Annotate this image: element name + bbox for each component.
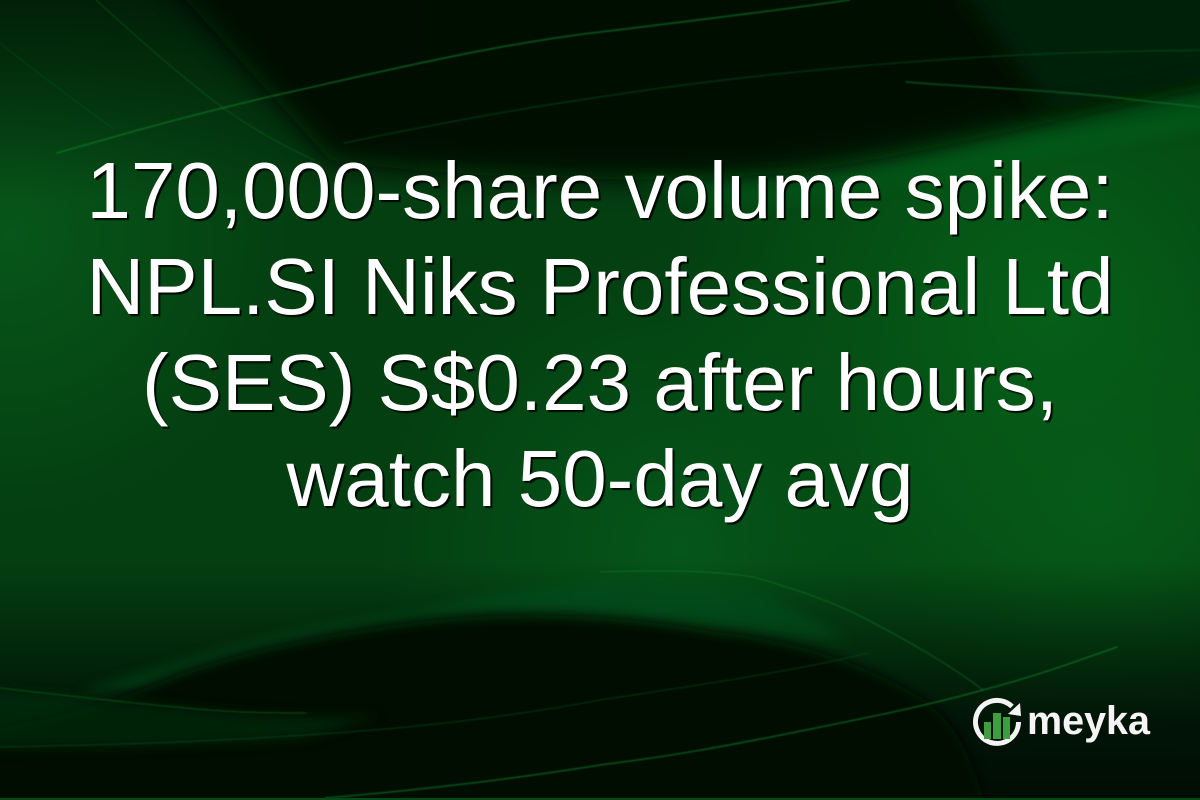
title: watch 50-day avg	[286, 434, 914, 523]
title	[86, 146, 1114, 525]
logo: meyka	[973, 698, 1151, 746]
title: (SES) S$0.23 after hours,	[142, 338, 1058, 427]
title: 170,000-share volume spike:	[86, 146, 1114, 235]
icon: chart in ring	[976, 700, 1021, 743]
title: NPL.SI Niks Professional Ltd	[86, 242, 1114, 331]
wordmark: meyka	[1027, 699, 1151, 743]
